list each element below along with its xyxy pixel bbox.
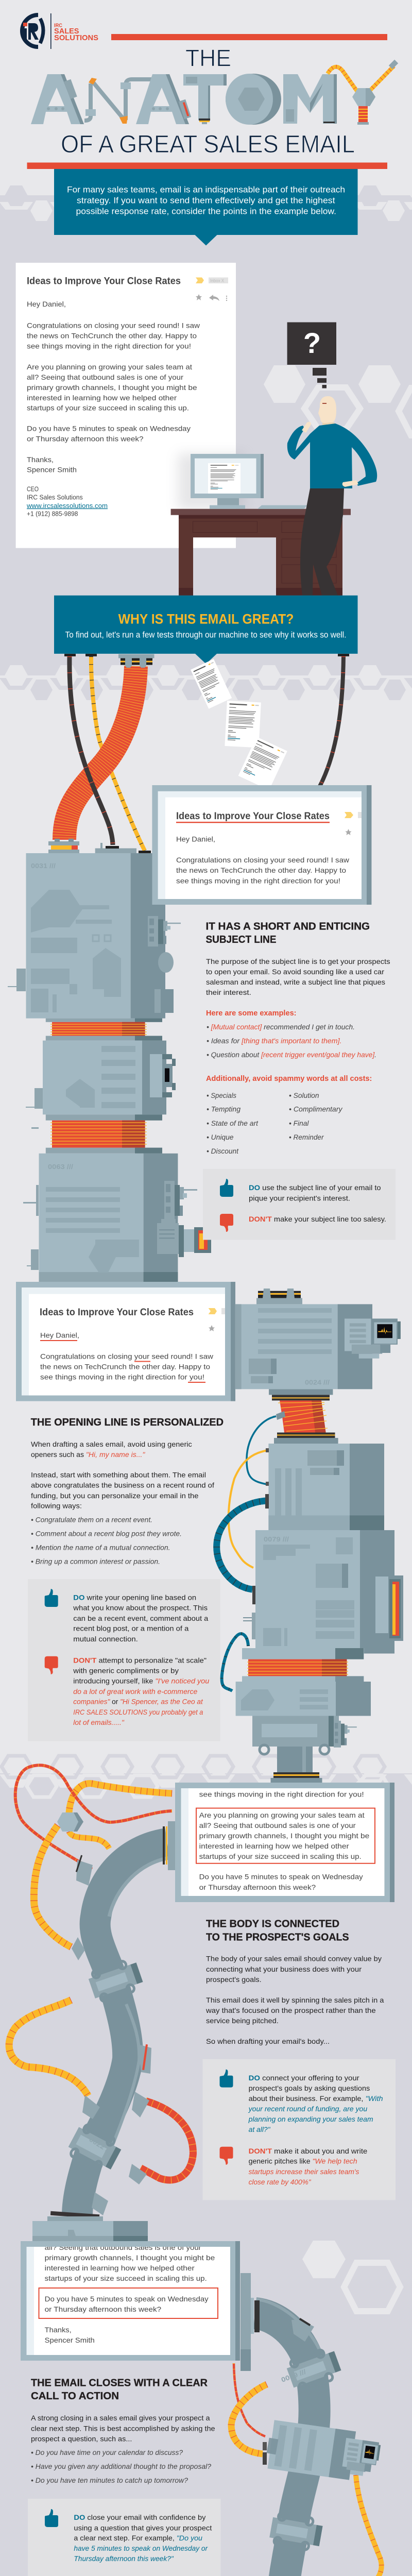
do and don't box: a clear next step. For example, "Do you <box>74 2534 202 2542</box>
section 3 text: body connected to goals: prospect's goals. <box>206 1975 262 1984</box>
do and don't box <box>202 2059 396 2200</box>
monitor 4: call to action highlighted: startups of your size succeed in scaling this up. <box>45 2274 207 2282</box>
do and don't box: using a question that gives your prospect <box>74 2523 212 2532</box>
do and don't box: about their business. For example, "With <box>249 2094 383 2103</box>
monitor 3: body highlighted: see things moving in the right direction for you! <box>199 1790 364 1798</box>
section 4 text: clear call to action <box>28 2377 221 2576</box>
do and don't box: recent blog post, or a mention of a <box>73 1624 189 1633</box>
machine stack 2 <box>235 1289 403 1783</box>
banner: why is this email great: To find out, let's run a few tests through our machine to see why it works so well. <box>65 631 346 640</box>
panel: example email: or Thursday afternoon this week? <box>27 435 144 443</box>
section 1 text: short and enticing subject line: Additionally, avoid spammy words at all costs: <box>206 1074 372 1083</box>
heading: THE BODY IS CONNECTED <box>206 1919 339 1930</box>
title bar: top <box>111 34 387 40</box>
monitor 1: subject line highlighted <box>152 785 371 905</box>
monitor 4: call to action highlighted: all? Seeing that outbound sales is one of your <box>45 2243 201 2251</box>
heading <box>206 921 370 945</box>
do and don't box: DO connect your offering to your <box>249 2074 359 2082</box>
heading <box>31 2377 208 2402</box>
panel: example email: www.ircsalessolutions.com <box>26 502 108 510</box>
desktop computer <box>191 454 307 509</box>
logo: IRC Sales Solutions <box>22 13 98 49</box>
monitor 1: subject line highlighted: the news on TechCrunch the other day. Happy to <box>176 866 346 874</box>
title: ANATOMY machine letters <box>31 60 398 125</box>
monitor 2: opening line highlighted: Congratulations on closing your seed round! I saw <box>40 1352 214 1360</box>
cables: machine inputs <box>64 656 344 851</box>
monitor 1: subject line highlighted: Hey Daniel, <box>176 835 215 843</box>
machine stack 2: 0079 /// <box>264 1535 289 1543</box>
section 2 text: opening line personalized: openers such as "Hi, my name is..." <box>31 1450 145 1459</box>
panel: example email: the news on TechCrunch the other day. Happy to <box>27 331 197 340</box>
intro callout <box>54 169 357 245</box>
section 1 text: short and enticing subject line: • Ideas for [thing that's important to them]. <box>207 1037 342 1045</box>
do and don't box: planning on expanding your sales team <box>248 2115 373 2123</box>
heading: THE OPENING LINE IS PERSONALIZED <box>31 1417 224 1428</box>
section 2 text: opening line personalized: • Comment about a recent blog post they wrote. <box>31 1529 182 1537</box>
monitor 3: body highlighted: startups of your size succeed in scaling this up. <box>199 1852 362 1860</box>
cables: second machine group <box>217 1416 276 1691</box>
section 4 text: clear call to action: • Do you have ten minutes to catch up tomorrow? <box>31 2476 188 2484</box>
do and don't box: at all?" <box>249 2125 271 2133</box>
papers falling into machine <box>191 659 287 790</box>
heading <box>206 1919 349 1943</box>
cables: closing section <box>231 2363 382 2576</box>
intro callout: strategy. If you want to send them effectively and get the highest <box>77 196 335 206</box>
monitor 3: body highlighted: Do you have 5 minutes to speak on Wednesday <box>199 1873 363 1881</box>
do and don't box: DON'T attempt to personalize "at scale" <box>73 1656 207 1665</box>
panel: example email: +1 (912) 885-9898 <box>27 511 78 518</box>
do and don't box: DO use the subject line of your email to <box>249 1183 381 1192</box>
panel: example email: interested in learning how we helped other <box>27 394 177 402</box>
do and don't box <box>28 2499 221 2576</box>
title bar: bottom <box>27 163 387 169</box>
panel: example email: Hey Daniel, <box>27 300 66 308</box>
monitor 1: subject line highlighted: see things moving in the right direction for you! <box>176 877 340 885</box>
banner: why is this email great: WHY IS THIS EMAIL GREAT? <box>118 611 294 626</box>
do and don't box: Thursday afternoon this week?" <box>74 2554 174 2563</box>
section 4 text: clear call to action: A strong closing in a sales email gives your prospect a <box>31 2414 210 2422</box>
do and don't box: have 5 minutes to speak on Wednesday or <box>74 2544 208 2552</box>
monitor 1: subject line highlighted: Congratulations on closing your seed round! I saw <box>176 856 350 864</box>
section 1 text: short and enticing subject line: • Discount <box>207 1147 239 1155</box>
section 3 text: body connected to goals: This email does it well by spinning the sales pitch in a <box>206 1996 384 2004</box>
section 4 text: clear call to action: • Do you have time on your calendar to discuss? <box>31 2448 183 2456</box>
intro callout: For many sales teams, email is an indispensable part of their outreach <box>67 185 345 195</box>
do and don't box: do a lot of great work with e-commerce <box>73 1687 198 1696</box>
title: THE: THE <box>185 44 231 71</box>
do and don't box: mutual connection. <box>73 1635 138 1643</box>
section 3 text: body connected to goals <box>202 1919 396 2200</box>
monitor 4: call to action highlighted: primary growth channels, I thought you might be <box>45 2253 215 2262</box>
section 2 text: opening line personalized: funding, but you can personalize your email in the <box>31 1492 199 1500</box>
pipe fittings: body section <box>32 1812 175 2241</box>
monitor 2: opening line highlighted: Hey Daniel, <box>40 1331 79 1340</box>
section 1 text: short and enticing subject line: • Final <box>289 1119 309 1127</box>
section 1 text: short and enticing subject line: • Tempting <box>207 1105 241 1113</box>
monitor 4: call to action highlighted: Thanks, <box>45 2326 72 2334</box>
section 1 text: short and enticing subject line: • Solution <box>289 1091 319 1099</box>
monitor 3: body highlighted <box>175 1783 394 1902</box>
section 1 text: short and enticing subject line: • Complimentary <box>289 1105 342 1113</box>
intro callout: possible response rate, consider the points in the example below. <box>76 207 336 216</box>
section 4 text: clear call to action: prospect a question, such as... <box>31 2435 132 2443</box>
desk <box>171 509 351 596</box>
pipe fittings: closing section <box>234 2273 382 2576</box>
thought bubble: ? <box>303 327 321 359</box>
panel: example email: IRC Sales Solutions <box>27 494 83 501</box>
do and don't box: DO close your email with confidence by <box>74 2513 205 2521</box>
do and don't box: IRC SALES SOLUTIONS you probably get a <box>73 1708 203 1716</box>
pipe fittings: closing section: 0019 /// <box>280 2367 307 2384</box>
logo: IRC Sales Solutions: SALES <box>54 27 79 36</box>
do and don't box: your recent round of funding, are you <box>248 2105 367 2113</box>
section 1 text: short and enticing subject line: their interest. <box>206 988 251 996</box>
monitor 3: body highlighted: all? Seeing that outbound sales is one of your <box>199 1821 356 1829</box>
section 2 text: opening line personalized: following ways: <box>31 1502 82 1510</box>
section 1 text: short and enticing subject line <box>203 921 396 1240</box>
section 2 text: opening line personalized: • Mention the name of a mutual connection. <box>31 1544 170 1552</box>
thought bubble <box>287 323 336 388</box>
do and don't box <box>28 1579 220 1741</box>
section 3 text: body connected to goals: way that's focused on the prospect rather than the <box>205 2006 376 2014</box>
section 1 text: short and enticing subject line: • [Mutual contact] recommended I get in touch. <box>207 1023 355 1031</box>
section 1 text: short and enticing subject line: to open your email. So avoid sounding like a used car <box>206 968 384 976</box>
monitor 3: body highlighted: or Thursday afternoon this week? <box>199 1883 316 1891</box>
do and don't box: can be a recent event, comment about a <box>73 1614 209 1622</box>
section 2 text: opening line personalized <box>28 1417 224 1741</box>
curved pipe: closing section <box>255 2299 319 2576</box>
monitor 1: subject line highlighted: Ideas to Improve Your Close Rates <box>176 811 330 822</box>
section 1 text: short and enticing subject line: salesman and instead, write a subject line that piques <box>206 978 385 986</box>
section 3 text: body connected to goals: The body of your sales email should convey value by <box>206 1955 382 1963</box>
heading: CALL TO ACTION <box>31 2391 119 2402</box>
logo: IRC Sales Solutions: IRC <box>54 23 62 29</box>
section 2 text: opening line personalized: • Congratulate them on a recent event. <box>31 1516 152 1524</box>
section 2 text: opening line personalized: above congratulates the business on a recent round of <box>31 1481 214 1489</box>
monitor 2: opening line highlighted: the news on TechCrunch the other day. Happy to <box>40 1362 210 1370</box>
panel: example email: Are you planning on growing your sales team at <box>27 363 192 371</box>
heading: SUBJECT LINE <box>206 934 276 945</box>
section 2 text: opening line personalized: Instead, start with something about them. The email <box>31 1470 206 1479</box>
monitor 4: call to action highlighted: Spencer Smith <box>45 2336 95 2344</box>
do and don't box: close rate by 400%" <box>249 2178 312 2186</box>
do and don't box: DO write your opening line based on <box>73 1593 196 1601</box>
section 1 text: short and enticing subject line: • State of the art <box>207 1119 259 1127</box>
panel: example email <box>16 263 236 548</box>
panel: example email: Spencer Smith <box>27 466 77 474</box>
title: OF A GREAT SALES EMAIL: OF A GREAT SALES EMAIL <box>61 131 355 158</box>
section 1 text: short and enticing subject line: • Specials <box>207 1091 236 1099</box>
monitor 4: call to action highlighted: Do you have 5 minutes to speak on Wednesday <box>45 2295 209 2303</box>
do and don't box: with generic compliments or by <box>73 1666 179 1674</box>
monitor 2: opening line highlighted: Ideas to Improve Your Close Rates <box>40 1307 194 1318</box>
section 2 text: opening line personalized: • Bring up a common interest or passion. <box>31 1557 160 1566</box>
monitor 4: call to action highlighted <box>21 2241 240 2361</box>
section 1 text: short and enticing subject line: • Question about [recent trigger event/goal they have]. <box>207 1050 376 1059</box>
do and don't box: companies" or "Hi Spencer, as the Ceo at <box>73 1698 203 1706</box>
monitor 3: body highlighted: primary growth channels, I thought you might be <box>199 1832 370 1840</box>
cables: body section <box>9 1765 193 2180</box>
panel: example email: all? Seeing that outbound sales is one of your <box>27 373 183 381</box>
machine stack 2: 0024 /// <box>305 1379 330 1386</box>
do and don't box <box>203 1169 396 1240</box>
section 1 text: short and enticing subject line: The purpose of the subject line is to get your prospects <box>206 957 390 965</box>
illustration: man at desk thinking <box>171 323 377 596</box>
do and don't box: startups increase their sales team's <box>249 2167 359 2176</box>
logo: IRC Sales Solutions: SOLUTIONS <box>54 33 98 42</box>
panel: example email: Congratulations on closing your seed round! I saw <box>27 321 200 330</box>
heading: IT HAS A SHORT AND ENTICING <box>206 921 370 933</box>
monitor 2: opening line highlighted: see things moving in the right direction for you! <box>40 1373 204 1381</box>
monitor 3: body highlighted: Are you planning on growing your sales team at <box>199 1811 365 1819</box>
do and don't box: DON'T make it about you and write <box>249 2147 367 2155</box>
panel: example email: Thanks, <box>27 455 54 464</box>
section 3 text: body connected to goals: connecting what your business does with your <box>206 1965 362 1973</box>
section 4 text: clear call to action: clear next step. This is best accomplished by asking the <box>31 2424 215 2432</box>
do and don't box: prospect's goals by asking questions <box>249 2084 370 2092</box>
section 3 text: body connected to goals: service being pitched. <box>206 2016 279 2025</box>
do and don't box: generic pitches like "We help tech <box>249 2157 357 2165</box>
curved pipe: body section <box>77 1843 170 2215</box>
do and don't box: DON'T make your subject line too salesy. <box>249 1215 386 1223</box>
man <box>287 396 377 596</box>
do and don't box: introducing yourself, like "I've noticed you <box>73 1677 210 1685</box>
connector: under banner <box>64 654 349 668</box>
section 1 text: short and enticing subject line: • Reminder <box>289 1133 324 1141</box>
panel: example email: Inbox X <box>210 278 225 283</box>
section 2 text: opening line personalized: When drafting a sales email, avoid using generic <box>31 1440 192 1448</box>
monitor 4: call to action highlighted: or Thursday afternoon this week? <box>45 2305 161 2313</box>
heading: TO THE PROSPECT'S GOALS <box>206 1932 349 1943</box>
panel: example email: Do you have 5 minutes to speak on Wednesday <box>27 425 191 433</box>
machine stack 1 <box>8 839 211 1282</box>
pipe fittings: body section: 0022 /// <box>88 2136 114 2156</box>
panel: example email: Ideas to Improve Your Close Rates <box>27 276 181 287</box>
do and don't box: what you know about the prospect. This <box>73 1604 208 1612</box>
heading: THE EMAIL CLOSES WITH A CLEAR <box>31 2377 208 2388</box>
panel: example email: CEO <box>27 485 39 493</box>
do and don't box: lot of emails....." <box>73 1718 125 1726</box>
machine stack 1: 0063 /// <box>48 1163 73 1171</box>
panel: example email: see things moving in the right direction for you! <box>27 342 191 350</box>
banner: why is this email great <box>54 596 357 664</box>
section 4 text: clear call to action: • Have you given any additional thought to the proposal? <box>31 2462 211 2470</box>
panel: example email: primary growth channels, I thought you might be <box>27 383 197 392</box>
monitor 3: body highlighted: interested in learning how we helped other <box>199 1842 349 1850</box>
panel: example email: startups of your size succeed in scaling this up. <box>27 404 189 412</box>
section 1 text: short and enticing subject line: • Unique <box>207 1133 234 1141</box>
section 3 text: body connected to goals: So when drafting your email's body... <box>206 2037 330 2045</box>
monitor 4: call to action highlighted: interested in learning how we helped other <box>45 2264 195 2272</box>
monitor 2: opening line highlighted <box>16 1282 235 1401</box>
do and don't box: pique your recipient's interest. <box>249 1194 350 1202</box>
section 1 text: short and enticing subject line: Here are some examples: <box>206 1009 297 1018</box>
machine stack 1: 0031 /// <box>31 862 56 870</box>
